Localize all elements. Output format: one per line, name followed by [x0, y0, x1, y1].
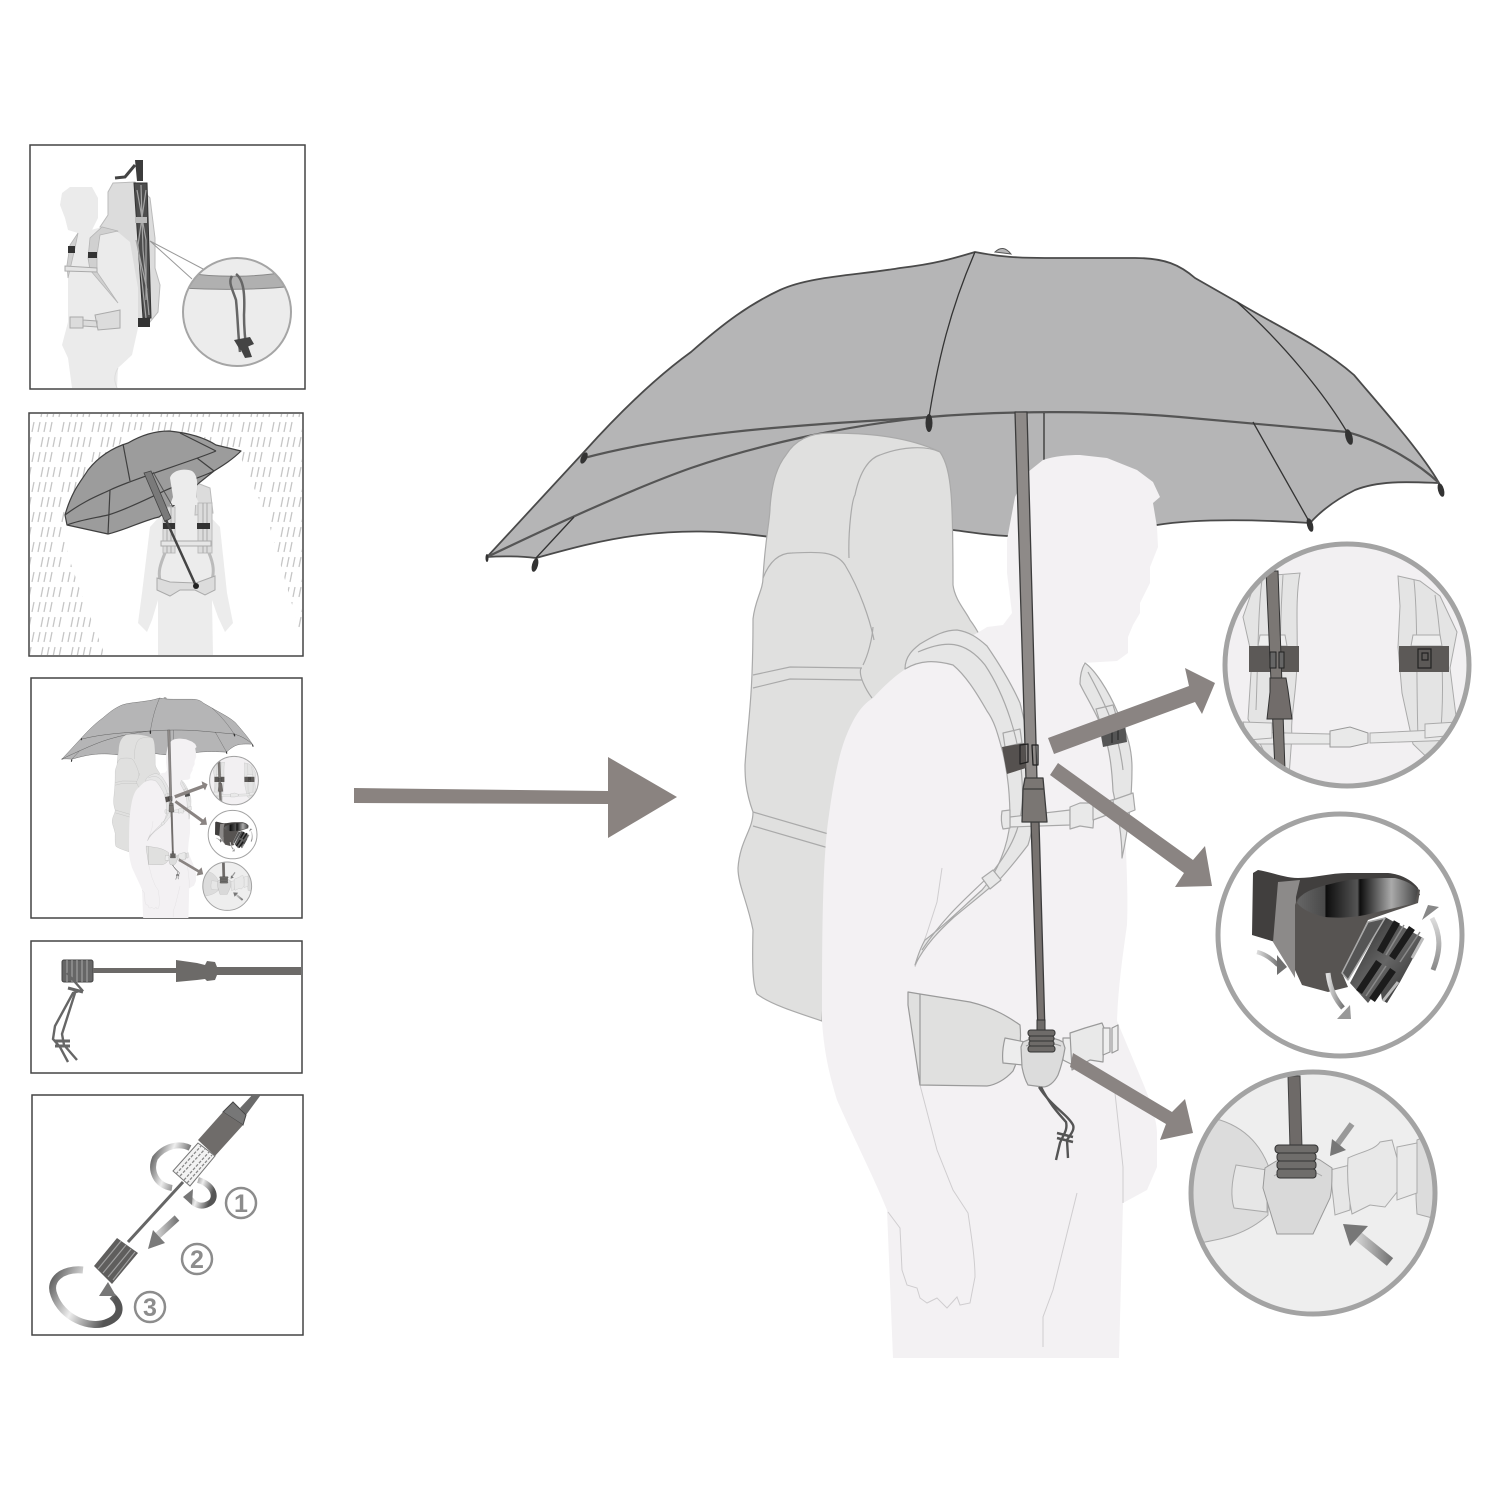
panel 4: handle and cord: [31, 941, 302, 1073]
zoom lines: [150, 241, 205, 279]
pole and sleeve: [198, 1092, 260, 1156]
shoulder straps: [905, 630, 1135, 965]
panel 5: extending steps: [32, 1092, 303, 1335]
straps: [163, 503, 212, 553]
panel 3: overview thumbnail: [31, 678, 302, 919]
chest strap: [161, 541, 211, 546]
umbrella canopy: [65, 431, 241, 534]
arrow to chest detail: [1048, 668, 1215, 754]
large arrow: [354, 757, 677, 838]
number 1: 1: [234, 1190, 248, 1218]
arrow to hip detail: [1070, 1053, 1193, 1140]
pole: [144, 471, 199, 589]
hiker silhouette: [822, 455, 1160, 1358]
ring arrow 1: [153, 1145, 214, 1206]
hand loop cord: [1039, 1087, 1073, 1160]
closed umbrella: [115, 160, 151, 327]
pack: [195, 483, 213, 515]
detail circle: hip socket: [1190, 1072, 1440, 1314]
bands: [163, 523, 210, 529]
detail circle: [180, 258, 295, 366]
threaded grip: [94, 1238, 138, 1284]
umbrella shaft and grip: [1002, 412, 1047, 1032]
pack: [100, 182, 160, 322]
head: [170, 470, 200, 505]
detail circle: strap mount: [1218, 814, 1462, 1056]
umbrella canopy: [486, 248, 1446, 573]
shoulder straps: [67, 227, 118, 303]
backpack: [738, 433, 990, 1021]
threaded handle end: [1028, 1020, 1055, 1052]
cord: [53, 973, 83, 1062]
threaded grip: [62, 960, 93, 982]
arm line: [115, 368, 118, 388]
panel 2: in rain, hands free: [29, 413, 303, 656]
ring arrow 3: [53, 1270, 119, 1324]
chest strap: [65, 266, 97, 272]
hip belt: [157, 576, 215, 596]
number 3: [135, 1292, 165, 1322]
detail circle: sternum strap: [1225, 544, 1469, 790]
hip belt: [70, 310, 120, 330]
main illustration: hiker with umbrella: [486, 248, 1469, 1358]
number 3: 3: [143, 1294, 157, 1322]
rain: [30, 414, 302, 655]
mount on far strap: [1100, 724, 1127, 747]
number 2: 2: [190, 1246, 204, 1274]
number 2: [182, 1244, 212, 1274]
panel 1: umbrella stowed on pack: [30, 145, 305, 389]
lower straps: [159, 553, 213, 580]
person silhouette: [138, 503, 233, 655]
number 1: [226, 1188, 256, 1218]
thumbnail of main illustration: [62, 697, 258, 919]
person silhouette: [60, 187, 138, 388]
strap bands: [68, 246, 97, 258]
arrow to mount detail: [1050, 763, 1212, 887]
rod and sleeve: [93, 960, 301, 982]
arrow 2: [148, 1218, 177, 1249]
hip belt: [908, 992, 1118, 1087]
threaded section: [173, 1143, 215, 1186]
rod: [128, 1182, 183, 1242]
